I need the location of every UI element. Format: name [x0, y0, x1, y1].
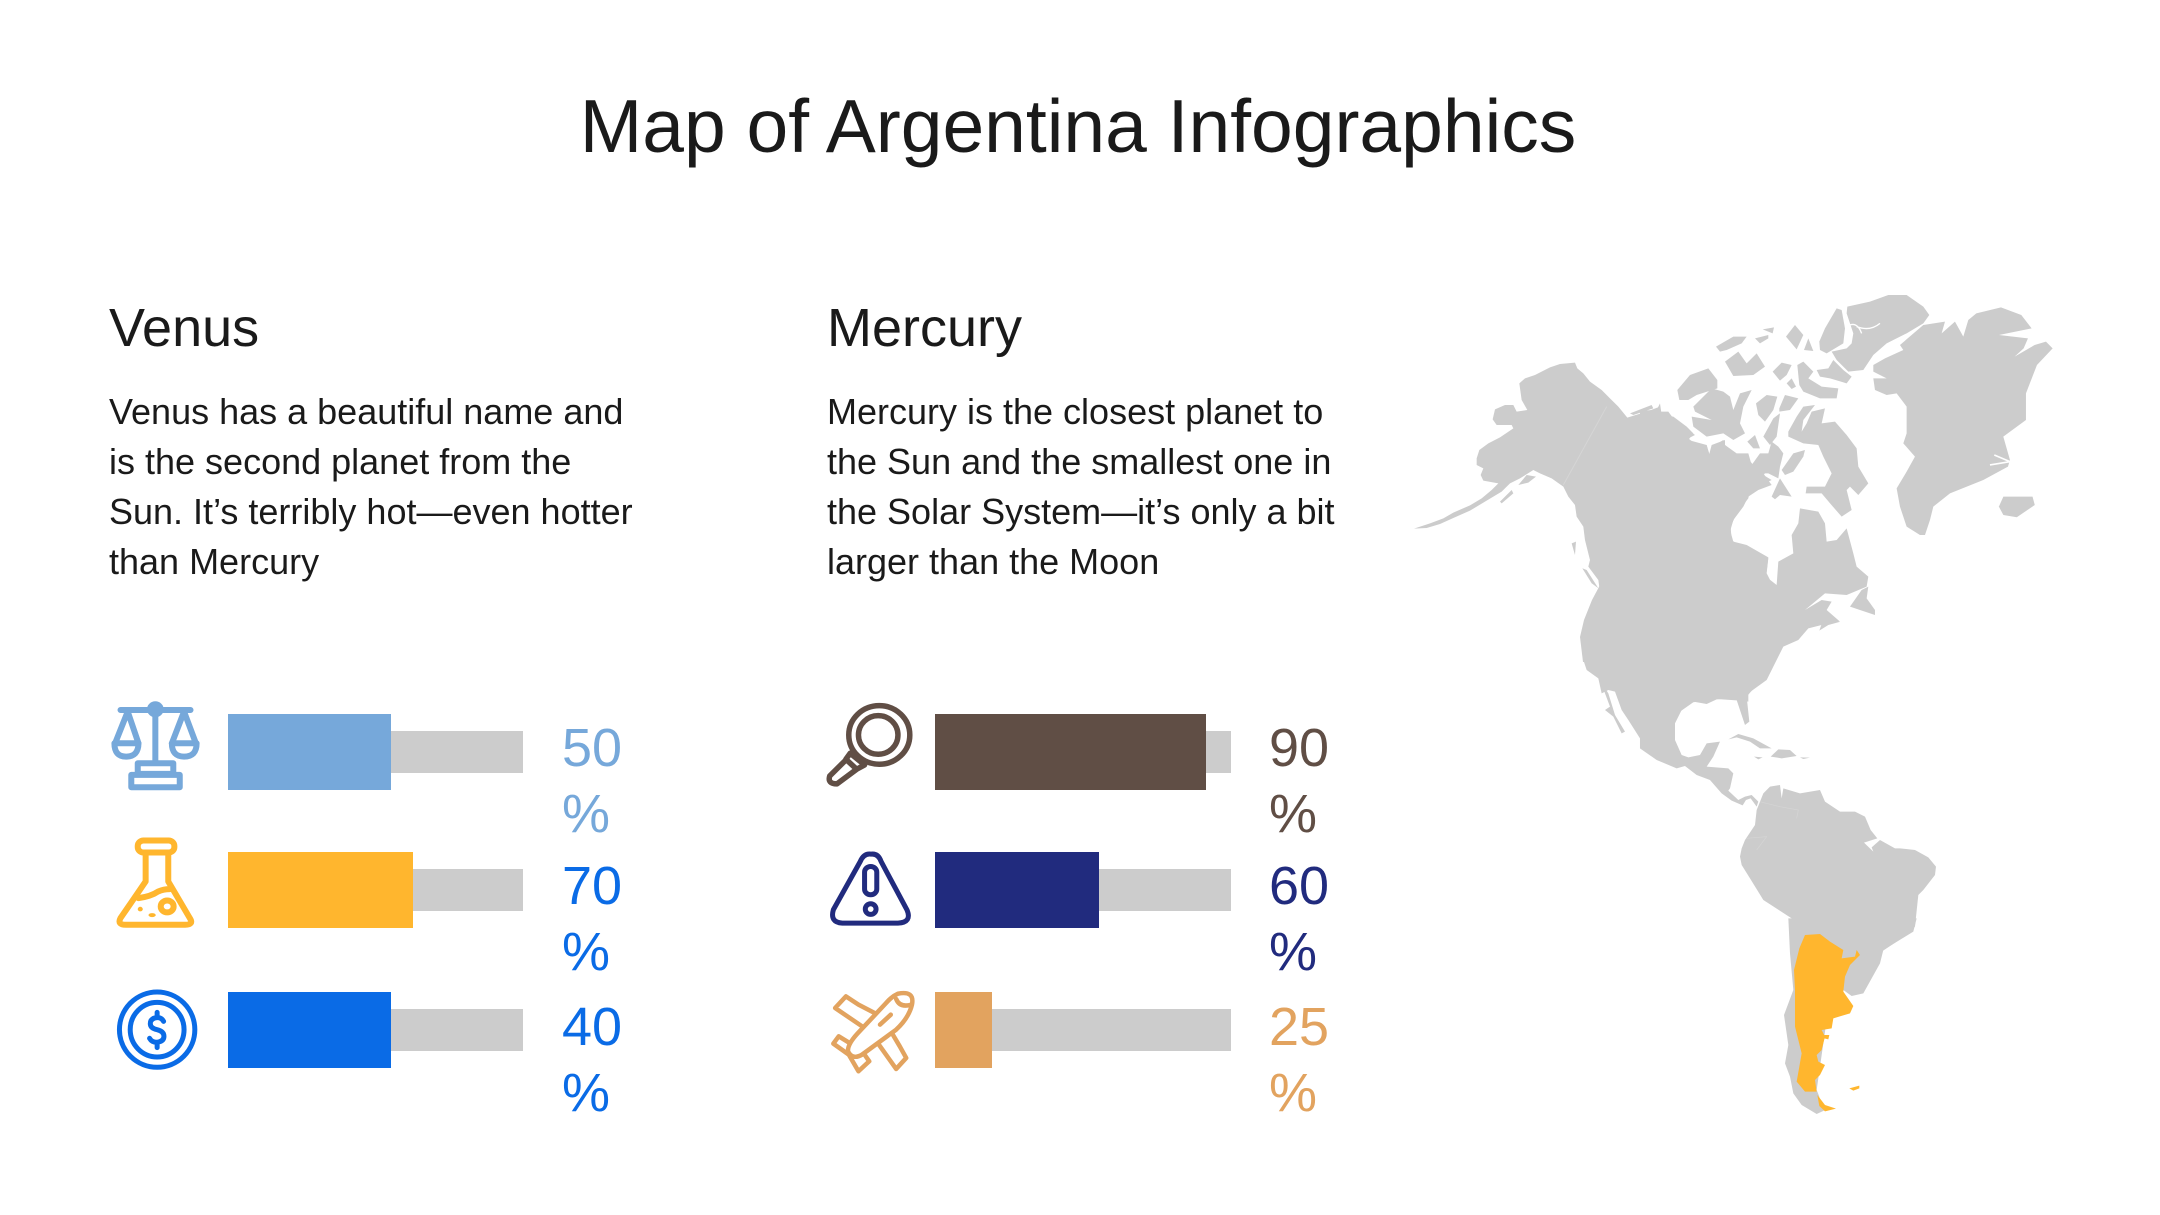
- bar chart: Venus 40: [228, 992, 523, 1068]
- icon: flask: [119, 841, 191, 925]
- text block: Venus description: than Mercury: [109, 541, 319, 582]
- arctic archipelago and greenland: [1640, 295, 2053, 535]
- value: 70%: 70: [562, 856, 622, 916]
- value: 25%: 25: [1269, 997, 1329, 1057]
- value: 25%: %: [1269, 1063, 1317, 1123]
- value: 50%: %: [562, 784, 610, 844]
- bar chart: Venus 70: [228, 852, 523, 928]
- western united states bridge: [1580, 585, 1700, 662]
- icon: dollar coin: [119, 992, 195, 1067]
- mexico, central america and caribbean: [1583, 660, 1810, 807]
- bar chart: Mercury 25: [935, 992, 1231, 1068]
- value: 25%: [1269, 997, 1329, 1123]
- eastern canada and united states: [1640, 470, 1875, 712]
- alaska and western canada: [1414, 363, 1773, 592]
- icon: balance scales: [114, 704, 197, 787]
- text block: Venus description: [109, 391, 633, 582]
- icon: airplane: [833, 993, 912, 1071]
- bar chart: Mercury 90: [935, 714, 1231, 790]
- value: 60%: %: [1269, 922, 1317, 982]
- text block: Mercury description: larger than the Moon: [827, 541, 1159, 582]
- value: 50%: [562, 718, 622, 844]
- text block: Venus description: is the second planet from the: [109, 441, 571, 482]
- text block: Mercury description: the Sun and the smallest one in: [827, 441, 1331, 482]
- value: 50%: 50: [562, 718, 622, 778]
- map: Americas with Argentina highlighted: [1414, 295, 2053, 1114]
- value: 70%: %: [562, 922, 610, 982]
- value: 60%: [1269, 856, 1329, 982]
- text block: Mercury description: [827, 391, 1335, 582]
- heading: Mercury: Mercury: [827, 298, 1022, 358]
- value: 40%: 40: [562, 997, 622, 1057]
- bar chart: Mercury 60: [935, 852, 1231, 928]
- south america north: [1740, 785, 1936, 952]
- value: 40%: %: [562, 1063, 610, 1123]
- value: 70%: [562, 856, 622, 982]
- text block: Mercury description: Mercury is the closest planet to: [827, 391, 1323, 432]
- title: Map of Argentina Infographics: [580, 84, 1576, 168]
- value: 90%: [1269, 718, 1329, 844]
- value: 40%: [562, 997, 622, 1123]
- south america south: [1784, 918, 1917, 1114]
- icon: warning triangle: [833, 854, 908, 923]
- text block: Mercury description: the Solar System—it’s only a bit: [827, 491, 1335, 532]
- icon: magnifying glass: [829, 706, 910, 784]
- text block: Venus description: Venus has a beautiful name and: [109, 391, 623, 432]
- value: 60%: 60: [1269, 856, 1329, 916]
- value: 90%: %: [1269, 784, 1317, 844]
- bar chart: Venus 50: [228, 714, 523, 790]
- text block: Venus description: Sun. It’s terribly hot—even hotter: [109, 491, 633, 532]
- value: 90%: 90: [1269, 718, 1329, 778]
- iceland: [1999, 497, 2035, 517]
- argentina: [1794, 934, 1860, 1111]
- heading: Venus: Venus: [109, 298, 259, 358]
